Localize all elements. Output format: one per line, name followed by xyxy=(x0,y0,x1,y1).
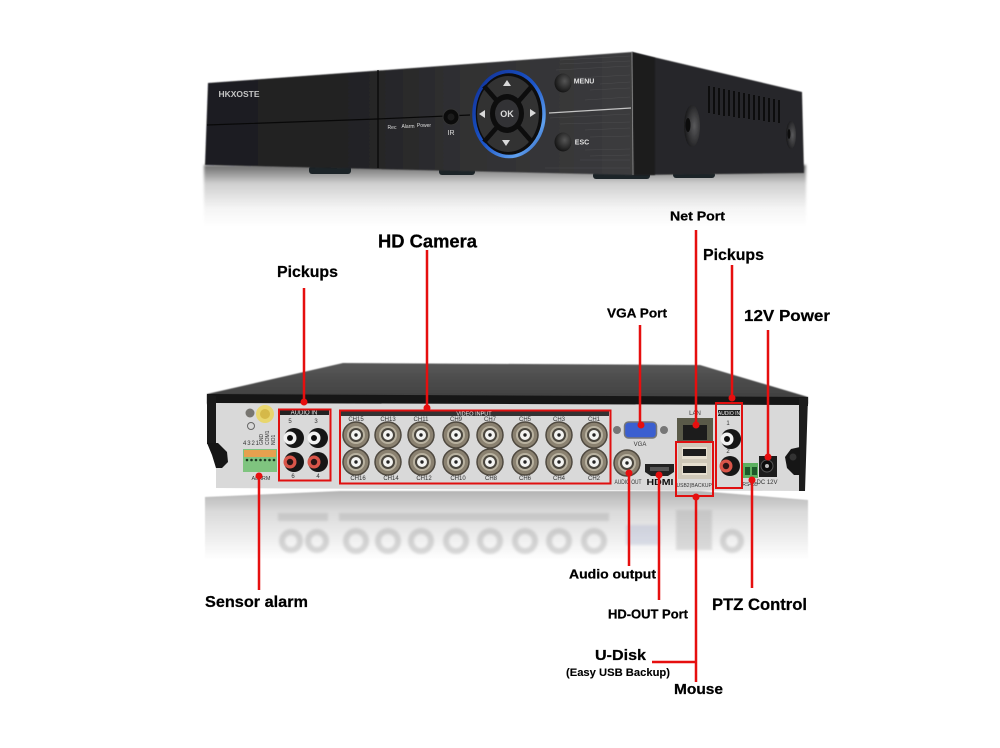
video input connectors: CH6 xyxy=(519,476,532,482)
navigation ring: OK xyxy=(500,109,514,119)
logo: HKXOSTE xyxy=(218,90,260,99)
leader dots xyxy=(256,394,772,500)
reflection ghost ports xyxy=(278,510,741,551)
photo: DVR rear view: COM1 xyxy=(265,430,271,445)
video input connectors: CH11 xyxy=(414,417,429,423)
video input connectors: CH1 xyxy=(588,417,601,423)
IR sensor xyxy=(443,109,459,137)
LAN port: LAN xyxy=(689,411,701,417)
MENU button xyxy=(554,74,594,92)
front panel xyxy=(205,52,634,175)
PTZ terminal: RS485 xyxy=(742,482,758,488)
label: Mouse: Mouse xyxy=(674,682,723,698)
corner strip xyxy=(632,52,655,175)
panel seams xyxy=(377,70,379,168)
video input connectors: VIDEO INPUT xyxy=(456,412,492,418)
video input connectors xyxy=(341,411,609,482)
photo: DVR rear view: GND xyxy=(259,434,265,445)
green alarm terminal: ALARM xyxy=(252,476,271,482)
feet xyxy=(309,166,715,179)
label: Net Port: Net Port xyxy=(670,208,726,224)
video input connectors: CH10 xyxy=(450,476,466,482)
leader lines xyxy=(259,230,768,682)
status labels: Rec xyxy=(388,125,397,131)
top cover xyxy=(207,363,808,404)
left flange xyxy=(207,394,216,444)
audio in block left: 4 xyxy=(316,474,320,480)
photo: DVR rear view xyxy=(205,363,808,560)
black edge band xyxy=(207,394,808,406)
audio out connector: AUDIO OUT xyxy=(614,480,642,486)
green alarm terminal xyxy=(243,449,277,482)
rear reflection xyxy=(205,491,808,560)
audio in block right: 2 xyxy=(726,449,730,455)
right ear xyxy=(785,447,800,475)
alarm terminal labels: 4 3 2 1 xyxy=(243,441,260,447)
red callout boxes xyxy=(279,403,742,496)
audio in block right xyxy=(718,410,741,476)
status labels: Power xyxy=(417,123,431,129)
ESC button xyxy=(554,132,589,152)
photo: DVR front view xyxy=(204,52,806,227)
video input connectors: CH15 xyxy=(348,417,364,423)
label: HD-OUT Port: HD-OUT Port xyxy=(608,606,689,622)
video input connectors: CH7 xyxy=(484,417,497,423)
video input connectors: CH4 xyxy=(553,476,566,482)
audio in block left: AUDIO IN xyxy=(291,410,317,416)
label: U-Disk: U-Disk xyxy=(595,647,647,664)
d-pad xyxy=(477,76,539,152)
photo: DVR rear view: NO1 xyxy=(271,434,277,445)
ESC button: ESC xyxy=(575,140,589,146)
label: Pickups left: Pickups xyxy=(277,264,338,281)
label: Audio output: Audio output xyxy=(569,566,657,582)
video input connectors: CH16 xyxy=(350,476,366,482)
DC power jack: DC 12V xyxy=(756,480,778,486)
PTZ terminal xyxy=(742,463,758,488)
video input connectors: CH8 xyxy=(485,476,498,482)
label: Pickups right: Pickups xyxy=(703,247,764,264)
video input connectors: CH12 xyxy=(416,476,432,482)
audio in block left xyxy=(280,410,329,480)
audio in block left: 3 xyxy=(314,419,318,425)
video input connectors: CH14 xyxy=(383,476,399,482)
video input connectors: CH5 xyxy=(519,417,532,423)
HDMI port: HDMI xyxy=(646,477,674,487)
HDMI port xyxy=(645,464,674,487)
left ear xyxy=(207,443,228,468)
audio in block right: AUDIO IN xyxy=(718,411,740,417)
brushed panel lines xyxy=(545,56,630,168)
IR sensor: IR xyxy=(448,130,454,137)
video input connectors: CH2 xyxy=(588,476,601,482)
front reflection xyxy=(204,165,806,227)
USB ports xyxy=(677,443,714,489)
label: HD Camera: HD Camera xyxy=(378,232,478,252)
vent xyxy=(709,86,779,123)
DC power jack xyxy=(756,456,778,486)
audio in block right: 1 xyxy=(726,421,730,427)
audio in block left: 6 xyxy=(291,474,295,480)
navigation ring xyxy=(474,72,544,156)
MENU button: MENU xyxy=(574,78,594,86)
VGA port: VGA xyxy=(634,442,646,448)
status labels xyxy=(388,123,431,131)
label: Sensor alarm: Sensor alarm xyxy=(205,594,308,611)
silver back panel xyxy=(216,403,800,491)
LAN port xyxy=(677,411,713,441)
label: PTZ Control: PTZ Control xyxy=(712,596,807,614)
ground screw xyxy=(246,405,274,430)
video input connectors: CH3 xyxy=(553,417,566,423)
label: Easy USB Backup: (Easy USB Backup) xyxy=(566,667,670,679)
right flange xyxy=(799,397,808,491)
video input connectors: CH9 xyxy=(450,417,463,423)
label: 12V Power: 12V Power xyxy=(744,308,830,325)
side panel xyxy=(632,52,804,175)
audio in block left: 5 xyxy=(288,419,292,425)
status labels: Alarm xyxy=(401,124,415,130)
VGA port xyxy=(613,422,668,448)
audio out connector xyxy=(614,450,642,486)
label: VGA Port: VGA Port xyxy=(607,306,668,320)
side screws xyxy=(684,105,700,147)
video input connectors: CH13 xyxy=(380,417,396,423)
USB ports: USB2(BACKUP) xyxy=(677,483,714,489)
